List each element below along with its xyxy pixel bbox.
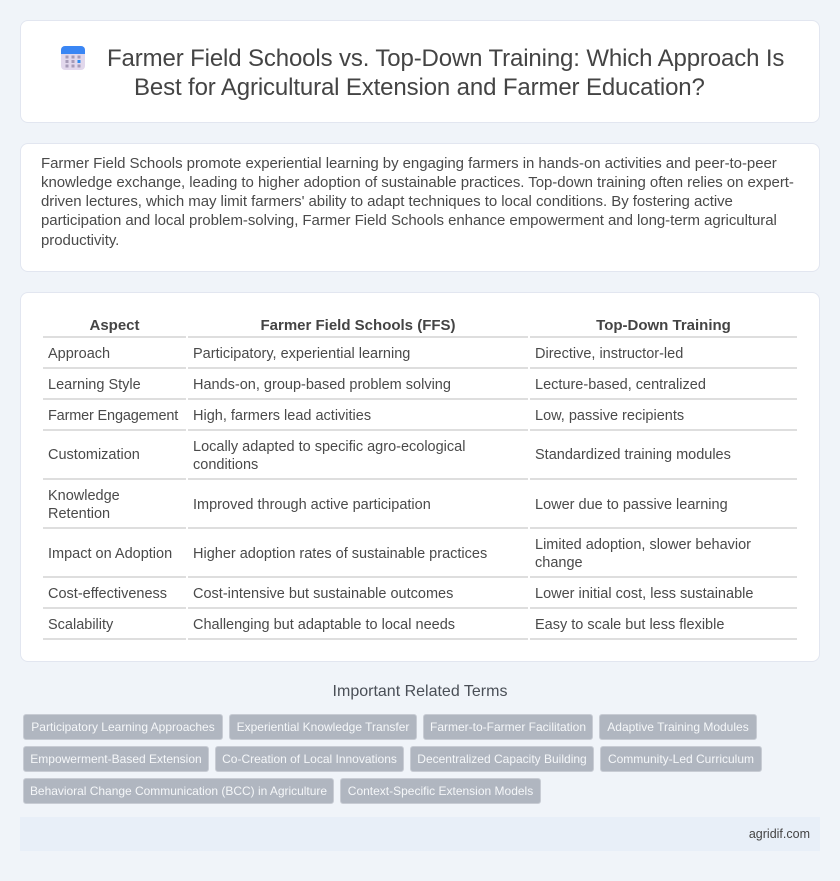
heading: important related terms: Important Related Terms <box>333 683 507 700</box>
text block: introduction <box>41 155 794 249</box>
text block: introduction: Farmer Field Schools promote experiential learning by engaging farmers in hands-on activities and peer-to-peer <box>41 155 777 172</box>
icon: calendar <box>61 46 85 70</box>
tags: related terms: Behavioral Change Communication (BCC) in Agriculture <box>30 784 327 798</box>
tags: related terms: Context-Specific Extension Models <box>348 784 533 798</box>
table header row: Top-Down Training <box>596 317 731 334</box>
table: comparison: Lower initial cost, less sustainable <box>535 586 753 602</box>
panel: comparison table <box>20 292 820 662</box>
table: comparison <box>43 317 797 640</box>
title: Best for Agricultural Extension and Farmer Education? <box>134 74 705 101</box>
tags: related terms: Farmer-to-Farmer Facilitation <box>430 720 586 734</box>
table header row <box>89 317 731 334</box>
row: customization: Customization <box>48 447 140 463</box>
table: comparison: Standardized training modules <box>535 447 731 463</box>
text block: introduction: driven lectures, which may limit farmers' ability to adapt techniques to local conditions. By fostering active <box>41 193 733 210</box>
table: comparison: Lecture-based, centralized <box>535 377 706 393</box>
row: approach: Approach <box>48 346 110 362</box>
panel: introduction text <box>20 143 820 272</box>
table: comparison: Directive, instructor-led <box>535 346 683 362</box>
footer <box>20 817 820 851</box>
table: comparison: Low, passive recipients <box>535 408 684 424</box>
tags: related terms: Empowerment-Based Extension <box>30 752 202 766</box>
table: comparison: Improved through active participation <box>193 497 431 513</box>
tags: related terms: Participatory Learning Approaches <box>31 720 215 734</box>
row: cost-effectiveness: Cost-effectiveness <box>48 586 167 602</box>
tags: related terms: Decentralized Capacity Building <box>417 752 587 766</box>
tags: related terms: Experiential Knowledge Transfer <box>237 720 409 734</box>
table: comparison: Locally adapted to specific agro-ecological <box>193 439 465 455</box>
table: comparison: Participatory, experiential learning <box>193 346 410 362</box>
table: comparison: conditions <box>193 457 258 473</box>
table: comparison: Retention <box>48 506 110 522</box>
table: comparison: High, farmers lead activities <box>193 408 371 424</box>
row: impact on adoption: Impact on Adoption <box>48 546 172 562</box>
table: comparison: Cost-intensive but sustainable outcomes <box>193 586 453 602</box>
row: learning style: Learning Style <box>48 377 141 393</box>
table header row: Farmer Field Schools (FFS) <box>260 317 456 334</box>
row: farmer engagement: Farmer Engagement <box>48 408 178 424</box>
text block: introduction: productivity. <box>41 232 119 249</box>
table header row: Aspect <box>89 317 140 334</box>
table: comparison: Lower due to passive learning <box>535 497 728 513</box>
table: comparison: change <box>535 555 583 571</box>
table: comparison: Higher adoption rates of sustainable practices <box>193 546 487 562</box>
panel: header <box>20 20 820 123</box>
table: comparison: Hands-on, group-based problem solving <box>193 377 451 393</box>
tags: related terms: Adaptive Training Modules <box>607 720 749 734</box>
table: comparison: Easy to scale but less flexible <box>535 617 724 633</box>
table: comparison: Limited adoption, slower behavior <box>535 537 751 553</box>
title <box>107 45 784 101</box>
text block: introduction: participation and local problem-solving, Farmer Field Schools enhance empowerment and long-term agricultural <box>41 212 777 229</box>
footer: site name: agridif.com <box>749 827 810 841</box>
row: knowledge retention: Knowledge <box>48 488 120 504</box>
text block: introduction: knowledge exchange, leading to higher adoption of sustainable practices. Top-down training often relies on expert- <box>41 174 794 190</box>
tags: related terms: Co-Creation of Local Innovations <box>222 752 397 766</box>
tags: related terms: Community-Led Curriculum <box>608 752 754 766</box>
title: Farmer Field Schools vs. Top-Down Training: Which Approach Is <box>107 45 784 72</box>
row: scalability: Scalability <box>48 617 113 633</box>
table: comparison: Challenging but adaptable to local needs <box>193 617 455 633</box>
